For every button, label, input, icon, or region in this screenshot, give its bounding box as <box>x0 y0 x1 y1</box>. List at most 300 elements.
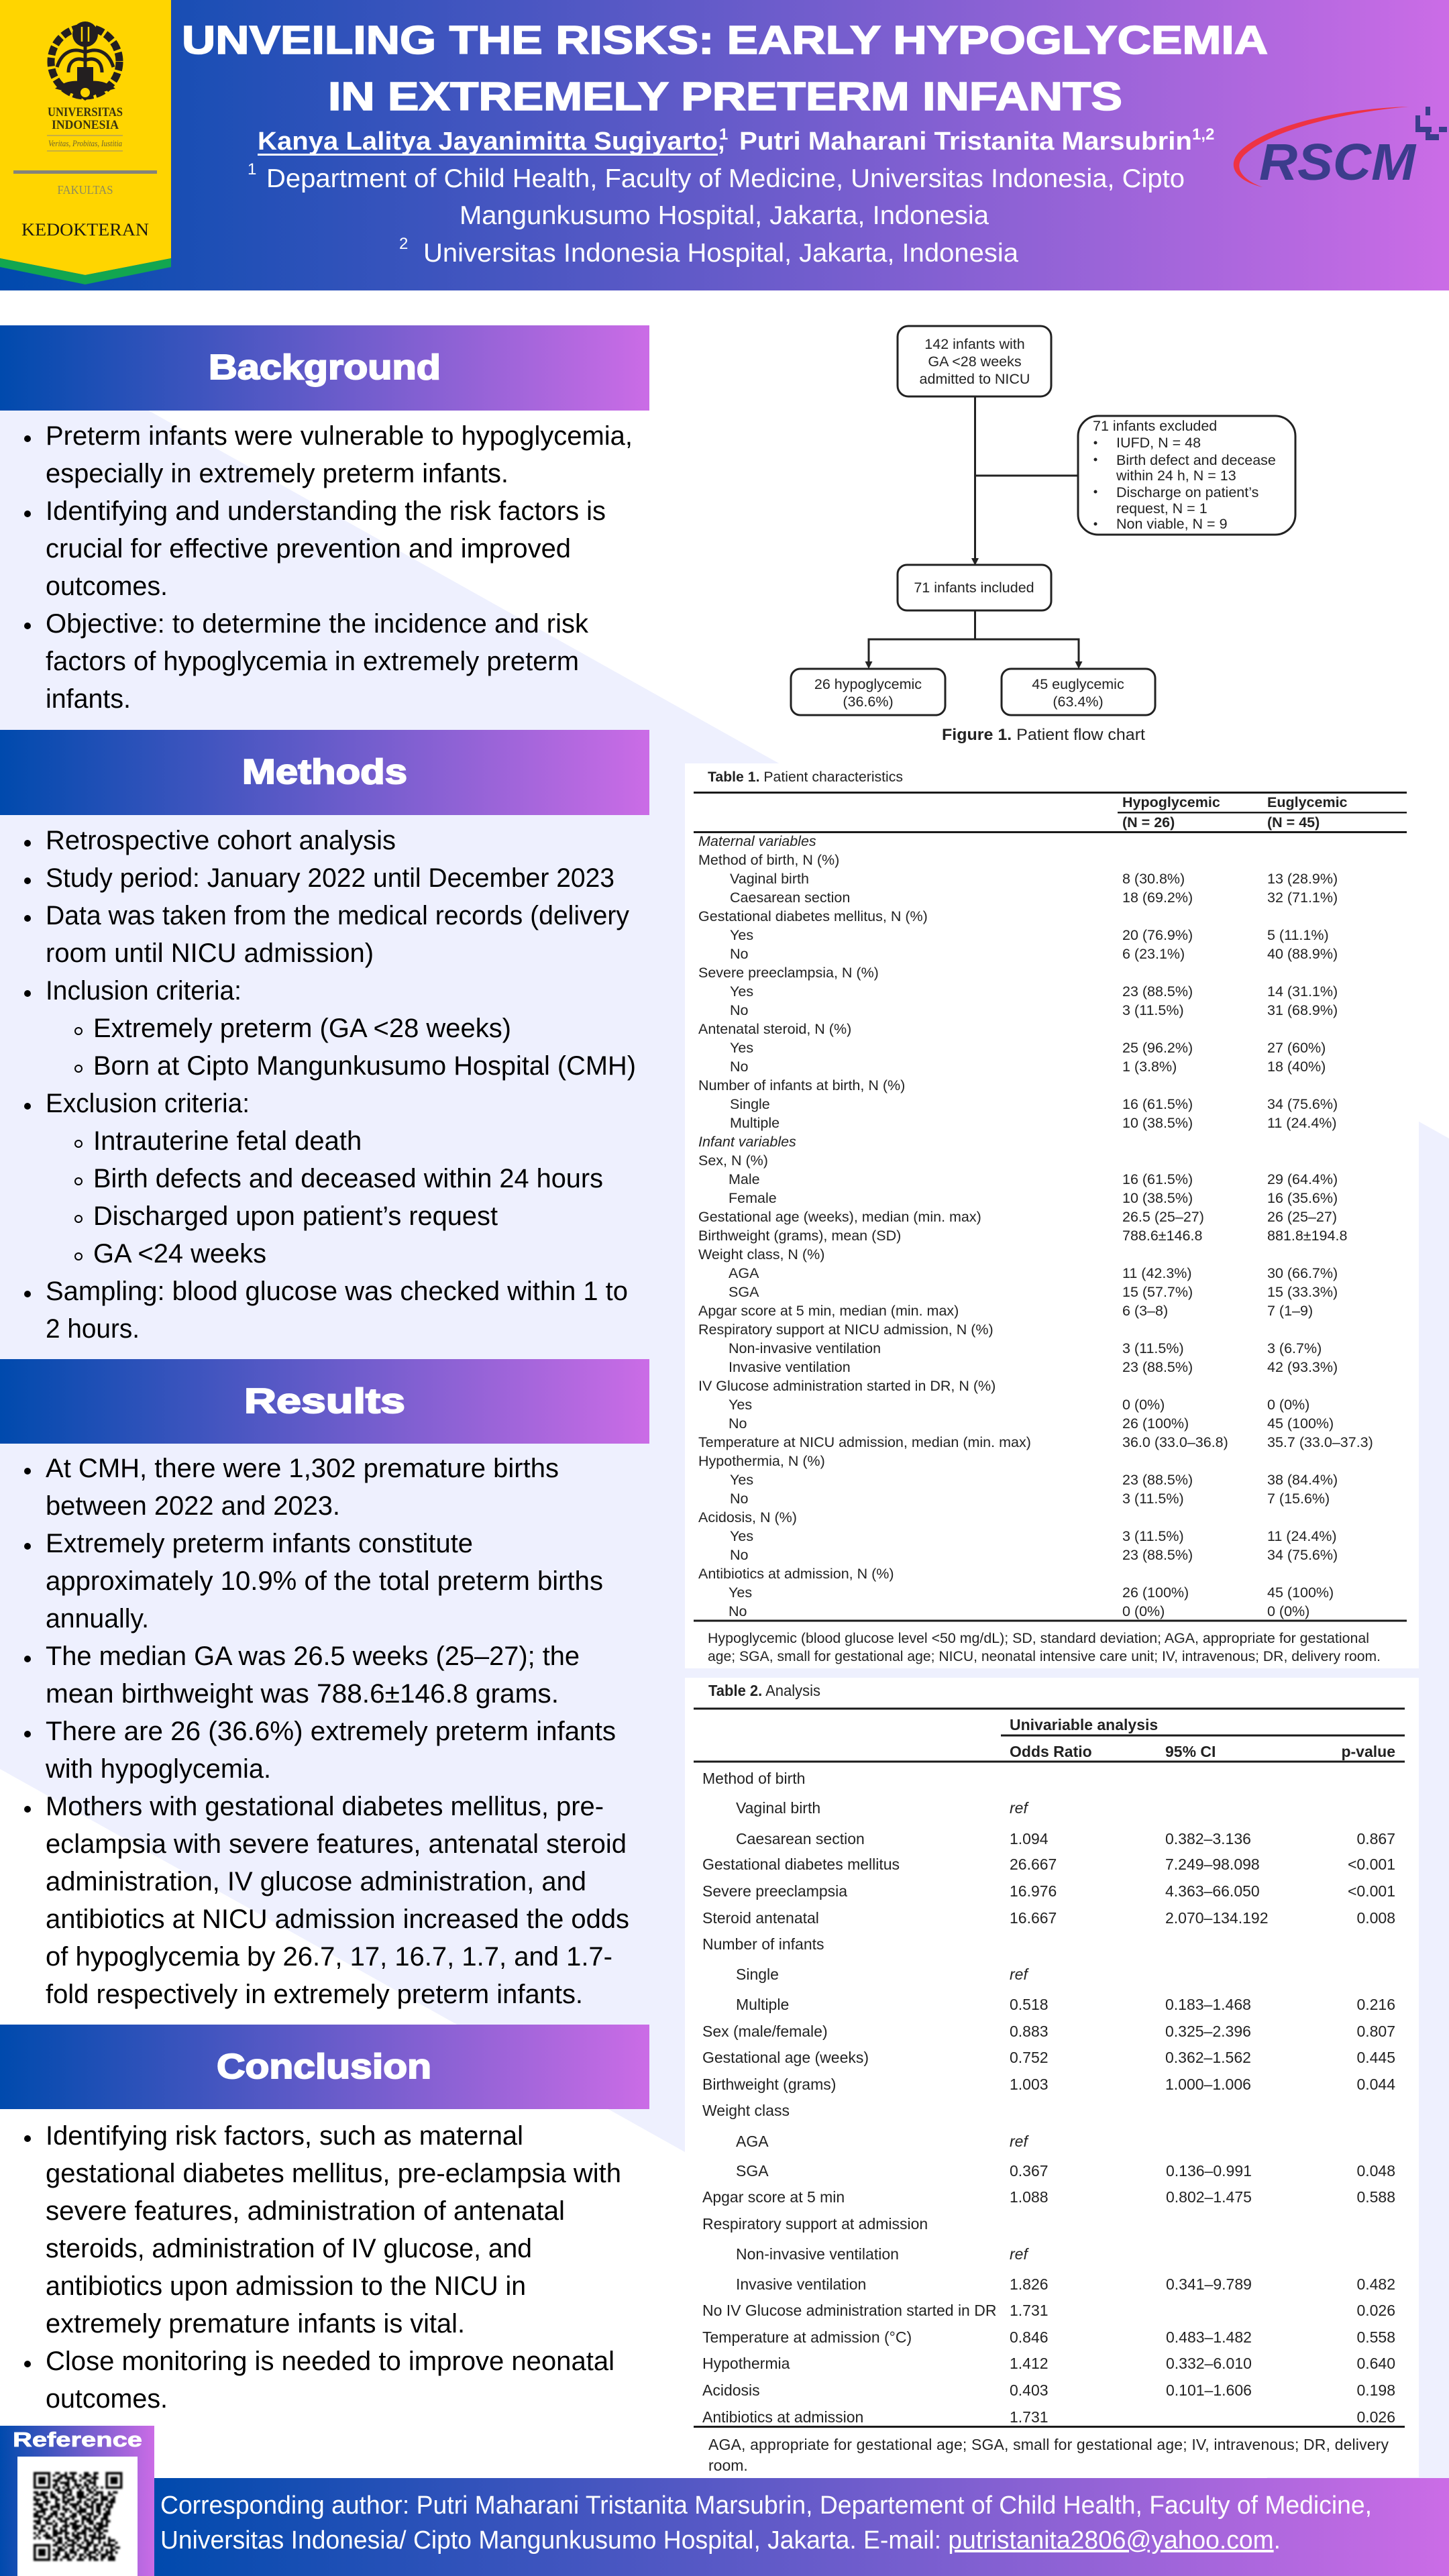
table 2 rows: Antibiotics at admission <box>702 2408 863 2426</box>
table 1 rows: Method of birth, N (%) <box>698 852 839 868</box>
table 1 rows: 23 (88.5%) <box>1122 1472 1193 1488</box>
table 2 rows: 0.483–1.482 <box>1166 2328 1252 2346</box>
table 1 rows: 31 (68.9%) <box>1267 1002 1338 1018</box>
affiliations <box>248 160 1185 268</box>
table 1 rows: Weight class, N (%) <box>698 1246 824 1263</box>
table 1 rows: Caesarean section <box>730 890 850 906</box>
table 1 rows: 7 (1–9) <box>1267 1303 1313 1319</box>
table 1 rows: 6 (3–8) <box>1122 1303 1168 1319</box>
flow box: excluded: within 24 h, N = 13 <box>1116 468 1236 484</box>
table 1 rows: 13 (28.9%) <box>1267 871 1338 887</box>
table 2 rows: 0.362–1.562 <box>1165 2049 1251 2066</box>
table 1 rows: 0 (0%) <box>1267 1397 1309 1413</box>
flow box: enrolled: GA <28 weeks <box>928 354 1022 370</box>
table 1 rows: No <box>729 1603 747 1619</box>
affiliations: Department of Child Health, Faculty of Medicine, Universitas Indonesia, Cipto <box>266 164 1185 193</box>
table 1 header: (N = 45) <box>1267 814 1320 830</box>
table 2 rows: 0.807 <box>1356 2023 1395 2040</box>
table 2 rows: Steroid antenatal <box>702 1909 819 1927</box>
panel: background heading <box>0 325 649 411</box>
table 2 header: p-value <box>1341 1743 1395 1760</box>
table 2 rows: 0.341–9.789 <box>1166 2275 1252 2293</box>
table 2 rows: 0.044 <box>1356 2076 1395 2093</box>
panel: methods text: Inclusion criteria: <box>46 976 241 1006</box>
table 1 rows: No <box>729 1415 747 1432</box>
table 1 rows: 45 (100%) <box>1267 1415 1334 1432</box>
table 2 rows: 0.403 <box>1010 2381 1049 2399</box>
icon: QR code <box>34 2472 122 2561</box>
flow box: euglycemic: 45 euglycemic <box>1032 676 1124 692</box>
panel: methods text: Data was taken from the medical records (delivery <box>46 901 629 930</box>
panel: background text: infants. <box>46 684 131 714</box>
table 1 rows: 26 (25–27) <box>1267 1209 1337 1225</box>
panel: conclusion heading <box>0 2025 649 2109</box>
panel: conclusion text <box>24 2121 621 2414</box>
logo: Universitas Indonesia Faculty of Medicine <box>0 0 171 284</box>
table 1 rows: 16 (35.6%) <box>1267 1190 1338 1206</box>
panel: methods text <box>24 826 636 1344</box>
table 1 rows: Vaginal birth <box>730 871 809 887</box>
table 1 rows: 23 (88.5%) <box>1122 1359 1193 1375</box>
panel: results text: At CMH, there were 1,302 premature births <box>46 1454 559 1483</box>
panel: conclusion text: Identifying risk factors, such as maternal <box>46 2121 523 2151</box>
table 2 rows: 1.731 <box>1010 2408 1049 2426</box>
table 1 rows: Apgar score at 5 min, median (min. max) <box>698 1303 959 1319</box>
flow box: excluded: 71 infants excluded <box>1093 418 1217 434</box>
table 1 rows: 20 (76.9%) <box>1122 927 1193 943</box>
table 1 rows: Yes <box>730 1528 753 1544</box>
flow box: excluded: Discharge on patient’s <box>1116 484 1258 500</box>
reference heading: Reference <box>13 2428 142 2451</box>
table 1 footnote: age; SGA, small for gestational age; NICU, neonatal intensive care unit; IV, intravenous; DR, delivery room. <box>708 1648 1381 1664</box>
panel: results text: fold respectively in extremely preterm infants. <box>46 1980 583 2009</box>
logo: RSCM <box>1234 107 1447 191</box>
panel: results text: administration, IV glucose administration, and <box>46 1867 586 1896</box>
table 2 rows: 4.363–66.050 <box>1165 1882 1260 1900</box>
table 1 rows: 34 (75.6%) <box>1267 1096 1338 1112</box>
table 1 rows: Multiple <box>730 1115 780 1131</box>
panel: results text: There are 26 (36.6%) extremely preterm infants <box>46 1717 616 1746</box>
table 1 rows: 8 (30.8%) <box>1122 871 1185 887</box>
panel: background text: factors of hypoglycemia in extremely preterm <box>46 647 579 676</box>
table 2 footnote: room. <box>708 2457 748 2474</box>
table 1 rows: 10 (38.5%) <box>1122 1115 1193 1131</box>
flow box: included <box>898 565 1051 610</box>
table 1 rows: Female <box>729 1190 777 1206</box>
panel: background text: Identifying and understanding the risk factors is <box>46 496 606 526</box>
table 1 rows: 16 (61.5%) <box>1122 1096 1193 1112</box>
table 2 rows: 0.558 <box>1356 2328 1395 2346</box>
panel: results text: approximately 10.9% of the total preterm births <box>46 1566 603 1596</box>
table 1 header <box>694 792 1407 833</box>
table 1 rows: AGA <box>729 1265 759 1281</box>
table 2 header: Odds Ratio <box>1010 1743 1092 1760</box>
table 1 rows: 15 (33.3%) <box>1267 1284 1338 1300</box>
table 1 rows: Number of infants at birth, N (%) <box>698 1077 905 1093</box>
panel: methods text: Birth defects and deceased within 24 hours <box>93 1164 603 1193</box>
table 2 rows: Apgar score at 5 min <box>702 2188 845 2206</box>
table 1 rows: Maternal variables <box>698 833 816 849</box>
table 1 rows: Temperature at NICU admission, median (min. max) <box>698 1434 1031 1450</box>
panel: results text: The median GA was 26.5 weeks (25–27); the <box>46 1642 580 1671</box>
panel: methods text: Intrauterine fetal death <box>93 1126 362 1156</box>
table 1 rows: Hypothermia, N (%) <box>698 1453 825 1469</box>
table 2 rows: 0.867 <box>1356 1830 1395 1847</box>
table 1 rows: Antibiotics at admission, N (%) <box>698 1566 894 1582</box>
panel: results text: antibiotics at NICU admission increased the odds <box>46 1904 629 1934</box>
flow box: enrolled <box>898 326 1051 396</box>
table 1 rows: 42 (93.3%) <box>1267 1359 1338 1375</box>
table 1 rows: 15 (57.7%) <box>1122 1284 1193 1300</box>
table 1 rows: Severe preeclampsia, N (%) <box>698 965 879 981</box>
panel: results text: between 2022 and 2023. <box>46 1491 340 1521</box>
panel: table 2 analysis <box>685 1678 1419 2477</box>
table 2 rows: 0.382–3.136 <box>1165 1830 1251 1847</box>
panel: results text: of hypoglycemia by 26.7, 17, 16.7, 1.7, and 1.7- <box>46 1942 612 1972</box>
table 2 rows: Multiple <box>736 1996 789 2013</box>
panel: methods text: Exclusion criteria: <box>46 1089 250 1118</box>
table 2 rows: Severe preeclampsia <box>702 1882 847 1900</box>
table 2 rows: 0.482 <box>1356 2275 1395 2293</box>
affiliations: 2 <box>399 235 408 253</box>
table 1 rows: 10 (38.5%) <box>1122 1190 1193 1206</box>
panel: reference with QR code <box>0 2426 154 2576</box>
flow box: included: 71 infants included <box>914 580 1034 596</box>
table 1 footnote: Hypoglycemic (blood glucose level <50 mg/dL); SD, standard deviation; AGA, appropriate for gestational <box>708 1630 1369 1646</box>
table 2 rows: 26.667 <box>1010 1856 1057 1873</box>
panel: background heading: Background <box>209 348 441 387</box>
panel: methods text: Study period: January 2022 until December 2023 <box>46 863 614 893</box>
table 1 rows: 11 (42.3%) <box>1122 1265 1192 1281</box>
table 1 rows: Single <box>730 1096 770 1112</box>
table 1 rows: No <box>730 1002 749 1018</box>
table 2 rows: ref <box>1010 2245 1029 2263</box>
table 1 rows: 3 (6.7%) <box>1267 1340 1322 1356</box>
flow box: excluded: IUFD, N = 48 <box>1116 435 1201 451</box>
panel: methods text: Discharged upon patient’s request <box>93 1201 498 1231</box>
table 2 rows: 0.101–1.606 <box>1166 2381 1252 2399</box>
table 2 rows: 0.198 <box>1356 2381 1395 2399</box>
flow box: excluded: request, N = 1 <box>1116 500 1208 517</box>
panel: conclusion text: Close monitoring is needed to improve neonatal <box>46 2347 614 2376</box>
figure caption: Figure 1. Patient flow chart <box>942 726 1145 744</box>
table 1 rows: 3 (11.5%) <box>1122 1491 1184 1507</box>
table 1 rows: 40 (88.9%) <box>1267 946 1338 962</box>
table 1 rows: IV Glucose administration started in DR, N (%) <box>698 1378 996 1394</box>
table 2 rows: 7.249–98.098 <box>1165 1856 1260 1873</box>
table 2 rows: No IV Glucose administration started in DR <box>702 2302 996 2319</box>
panel: conclusion heading: Conclusion <box>217 2047 431 2086</box>
flow chart: figure 1 <box>791 326 1295 744</box>
panel: methods text: 2 hours. <box>46 1314 140 1344</box>
table 1 rows: 18 (40%) <box>1267 1059 1326 1075</box>
table 2 rows: 0.588 <box>1356 2188 1395 2206</box>
table 1 rows: No <box>730 946 749 962</box>
panel: methods text: Extremely preterm (GA <28 weeks) <box>93 1014 511 1043</box>
table 2 rows: 1.094 <box>1010 1830 1049 1847</box>
flow box: excluded: Non viable, N = 9 <box>1116 516 1228 532</box>
table 1 rows: Male <box>729 1171 760 1187</box>
table 2 rows: 0.883 <box>1010 2023 1049 2040</box>
table 1 rows: 23 (88.5%) <box>1122 1547 1193 1563</box>
panel: methods text: Sampling: blood glucose was checked within 1 to <box>46 1277 628 1306</box>
table 2 rows: 0.846 <box>1010 2328 1049 2346</box>
table 1 rows: 788.6±146.8 <box>1122 1228 1202 1244</box>
affiliations: Mangunkusumo Hospital, Jakarta, Indonesia <box>460 201 989 230</box>
table 1 rows: 881.8±194.8 <box>1267 1228 1347 1244</box>
logo: Universitas Indonesia Faculty of Medicine: Veritas, Probitas, Iustitia <box>48 138 122 148</box>
table 1 rows: 6 (23.1%) <box>1122 946 1185 962</box>
table 1 header: Euglycemic <box>1267 794 1348 810</box>
panel: results text: annually. <box>46 1604 149 1633</box>
flow box: euglycemic <box>1002 669 1155 715</box>
table 1 rows: 26 (100%) <box>1122 1585 1189 1601</box>
table 1 rows: 29 (64.4%) <box>1267 1171 1338 1187</box>
table 1 rows: Yes <box>729 1397 752 1413</box>
table 2 rows: <0.001 <box>1348 1856 1395 1873</box>
table 1 rows <box>698 833 1373 1619</box>
table 2 rows: 0.183–1.468 <box>1165 1996 1251 2013</box>
table 1 rows: Birthweight (grams), mean (SD) <box>698 1228 901 1244</box>
table 1 rows: Yes <box>730 1040 753 1056</box>
table 1 rows: 26 (100%) <box>1122 1415 1189 1432</box>
table 2 rows: 1.412 <box>1010 2355 1049 2372</box>
title: IN EXTREMELY PRETERM INFANTS <box>328 74 1122 119</box>
table 1 rows: 30 (66.7%) <box>1267 1265 1338 1281</box>
table 2 rows <box>702 1770 1395 2426</box>
table 1 rows: 11 (24.4%) <box>1267 1115 1337 1131</box>
table 1 rows: 27 (60%) <box>1267 1040 1326 1056</box>
table 2 rows: Method of birth <box>702 1770 805 1787</box>
logo: Universitas Indonesia Faculty of Medicine: UNIVERSITAS <box>48 105 123 119</box>
table 2 rows: Vaginal birth <box>736 1799 820 1817</box>
table 2 rows: Acidosis <box>702 2381 760 2399</box>
logo: Universitas Indonesia Faculty of Medicine: KEDOKTERAN <box>21 220 149 239</box>
affiliations: 1 <box>248 160 256 178</box>
panel: methods heading: Methods <box>242 753 407 792</box>
table 2 rows: 0.518 <box>1010 1996 1049 2013</box>
panel: results heading <box>0 1359 649 1444</box>
title <box>182 18 1268 119</box>
table 1 rows: Yes <box>730 1472 753 1488</box>
panel: conclusion text: antibiotics upon admission to the NICU in <box>46 2271 526 2301</box>
table 1 rows: SGA <box>729 1284 759 1300</box>
table 1 rows: Sex, N (%) <box>698 1152 768 1169</box>
table 1 rows: No <box>730 1491 749 1507</box>
table 1 rows: 3 (11.5%) <box>1122 1528 1184 1544</box>
authors: 1,2 <box>1192 125 1214 144</box>
panel: conclusion text: outcomes. <box>46 2384 168 2414</box>
table 2 rows: Sex (male/female) <box>702 2023 828 2040</box>
table 1 header: Hypoglycemic <box>1122 794 1220 810</box>
panel: conclusion text: extremely premature infants is vital. <box>46 2309 465 2339</box>
table 1 rows: 26.5 (25–27) <box>1122 1209 1204 1225</box>
flow box: enrolled: 142 infants with <box>924 336 1025 352</box>
table 2 rows: 0.640 <box>1356 2355 1395 2372</box>
affiliations: Universitas Indonesia Hospital, Jakarta, Indonesia <box>423 239 1018 268</box>
table 1 rows: 1 (3.8%) <box>1122 1059 1177 1075</box>
panel: results text: eclampsia with severe features, antenatal steroid <box>46 1829 627 1859</box>
table 1 title: Table 1. Patient characteristics <box>708 769 903 785</box>
flow box: excluded <box>1078 416 1295 535</box>
authors: Putri Maharani Tristanita Marsubrin <box>739 127 1192 156</box>
table 1 rows: Antenatal steroid, N (%) <box>698 1021 851 1037</box>
authors <box>258 125 1214 156</box>
authors: Kanya Lalitya Jayanimitta Sugiyarto <box>258 127 718 156</box>
footer: corresponding author <box>154 2478 1449 2576</box>
table 1 rows: 0 (0%) <box>1122 1397 1165 1413</box>
panel: methods text: Born at Cipto Mangunkusumo Hospital (CMH) <box>93 1051 636 1081</box>
title: UNVEILING THE RISKS: EARLY HYPOGLYCEMIA <box>182 18 1268 62</box>
table 2 rows: Temperature at admission (°C) <box>702 2328 912 2346</box>
table 1 rows: 35.7 (33.0–37.3) <box>1267 1434 1373 1450</box>
logo: Universitas Indonesia Faculty of Medicine: FAKULTAS <box>58 183 113 197</box>
panel: results text: with hypoglycemia. <box>45 1754 271 1784</box>
flow box: hypoglycemic <box>791 669 945 715</box>
panel: results text: Mothers with gestational diabetes mellitus, pre- <box>46 1792 604 1821</box>
table 1 rows: Respiratory support at NICU admission, N (%) <box>698 1322 994 1338</box>
panel: methods text: Retrospective cohort analysis <box>46 826 396 855</box>
panel: methods heading <box>0 730 649 815</box>
footer: corresponding author: Universitas Indonesia/ Cipto Mangunkusumo Hospital, Jakarta. E-mail: putristanita2806@yahoo.com. <box>160 2526 1281 2555</box>
table 2 rows: Gestational diabetes mellitus <box>702 1856 900 1873</box>
table 1 rows: 14 (31.1%) <box>1267 983 1338 1000</box>
table 2 rows: 0.026 <box>1356 2408 1395 2426</box>
flow box: hypoglycemic: (36.6%) <box>843 694 894 710</box>
flow box: excluded: Birth defect and decease <box>1116 452 1276 468</box>
logo: RSCM: RSCM <box>1259 133 1417 191</box>
table 1 rows: Invasive ventilation <box>729 1359 851 1375</box>
table 2 rows: 0.048 <box>1356 2162 1395 2180</box>
panel: background text <box>24 421 633 714</box>
table 2 rows: 0.752 <box>1010 2049 1049 2066</box>
footer: corresponding author: Corresponding author: Putri Maharani Tristanita Marsubrin, Departement of Child Health, Faculty of Medicine, <box>160 2491 1372 2520</box>
panel: methods text: GA <24 weeks <box>93 1239 266 1269</box>
table 1 rows: 32 (71.1%) <box>1267 890 1338 906</box>
table 1 rows: 3 (11.5%) <box>1122 1002 1184 1018</box>
table 2 rows: Non-invasive ventilation <box>736 2245 899 2263</box>
panel: background text: Objective: to determine the incidence and risk <box>46 609 589 639</box>
table 1 rows: 7 (15.6%) <box>1267 1491 1330 1507</box>
table 2 rows: AGA <box>736 2133 769 2150</box>
table 1 rows: 3 (11.5%) <box>1122 1340 1184 1356</box>
table 2 rows: <0.001 <box>1348 1882 1395 1900</box>
table 2 rows: 1.003 <box>1010 2076 1049 2093</box>
table 1 rows: 16 (61.5%) <box>1122 1171 1193 1187</box>
panel: results text <box>24 1454 629 2009</box>
authors: , <box>718 127 725 156</box>
table 2 rows: Single <box>736 1966 779 1983</box>
table 2 rows: 1.731 <box>1010 2302 1049 2319</box>
table 1 rows: 5 (11.1%) <box>1267 927 1329 943</box>
table 1 rows: No <box>730 1547 749 1563</box>
table 2 rows: 0.445 <box>1356 2049 1395 2066</box>
table 2 rows: 2.070–134.192 <box>1165 1909 1268 1927</box>
table 1 rows: Acidosis, N (%) <box>698 1509 797 1525</box>
table 2 header <box>694 1708 1405 1763</box>
table 2 rows: 1.000–1.006 <box>1165 2076 1251 2093</box>
table 2 rows: ref <box>1010 1799 1029 1817</box>
table 2 rows: 0.332–6.010 <box>1166 2355 1252 2372</box>
table 2 rows: 1.088 <box>1010 2188 1049 2206</box>
table 1 rows: Non-invasive ventilation <box>729 1340 881 1356</box>
table 2 rows: Caesarean section <box>736 1830 865 1847</box>
flow box: enrolled: admitted to NICU <box>920 371 1030 387</box>
table 1 rows: 34 (75.6%) <box>1267 1547 1338 1563</box>
table 2 rows: SGA <box>736 2162 769 2180</box>
table 2 rows: Birthweight (grams) <box>702 2076 836 2093</box>
flow box: hypoglycemic: 26 hypoglycemic <box>814 676 922 692</box>
table 2 rows: Gestational age (weeks) <box>702 2049 869 2066</box>
table 2 rows: 1.826 <box>1010 2275 1049 2293</box>
table 1 rows: 0 (0%) <box>1122 1603 1165 1619</box>
table 1 rows: 38 (84.4%) <box>1267 1472 1338 1488</box>
panel: background text: Preterm infants were vulnerable to hypoglycemia, <box>46 421 633 451</box>
table 1 footnote <box>708 1630 1381 1664</box>
table 2 rows: Number of infants <box>702 1935 824 1953</box>
table 2 rows: 0.216 <box>1356 1996 1395 2013</box>
flow connectors and arrows <box>865 396 1083 669</box>
panel: table 1 patient characteristics <box>685 763 1419 1668</box>
table 2 rows: ref <box>1010 2133 1029 2150</box>
panel: background text: crucial for effective prevention and improved <box>46 534 571 564</box>
table 2 rows: 16.976 <box>1010 1882 1057 1900</box>
table 1 rows: 11 (24.4%) <box>1267 1528 1337 1544</box>
table 2 footnote <box>708 2436 1389 2474</box>
flow box: euglycemic: (63.4%) <box>1053 694 1104 710</box>
table 1 rows: Infant variables <box>698 1134 796 1150</box>
panel: conclusion text: severe features, administration of antenatal <box>46 2196 565 2226</box>
table 2 rows: ref <box>1010 1966 1029 1983</box>
table 2 rows: 16.667 <box>1010 1909 1057 1927</box>
table 2 rows: Respiratory support at admission <box>702 2215 928 2233</box>
panel: methods text: room until NICU admission) <box>46 938 374 968</box>
table 1 rows: Gestational age (weeks), median (min. max) <box>698 1209 981 1225</box>
table 2 rows: 0.136–0.991 <box>1166 2162 1252 2180</box>
panel: results heading: Results <box>244 1382 405 1421</box>
panel: results text: Extremely preterm infants constitute <box>46 1529 473 1558</box>
table 1 rows: 23 (88.5%) <box>1122 983 1193 1000</box>
table 1 rows: 0 (0%) <box>1267 1603 1309 1619</box>
panel: conclusion text: gestational diabetes mellitus, pre-eclampsia with <box>46 2159 621 2188</box>
table 2 rows: Weight class <box>702 2102 790 2119</box>
table 1 rows: 45 (100%) <box>1267 1585 1334 1601</box>
logo: Universitas Indonesia Faculty of Medicine: INDONESIA <box>52 118 119 132</box>
table 2 header: Univariable analysis <box>1010 1716 1158 1733</box>
table 1 rows: 25 (96.2%) <box>1122 1040 1193 1056</box>
table 1 rows: 18 (69.2%) <box>1122 890 1193 906</box>
table 1 rows: Yes <box>730 927 753 943</box>
table 2 footnote: AGA, appropriate for gestational age; SGA, small for gestational age; IV, intravenous; DR, delivery <box>708 2436 1389 2453</box>
panel: conclusion text: steroids, administration of IV glucose, and <box>46 2234 532 2263</box>
table 2 rows: 0.325–2.396 <box>1165 2023 1251 2040</box>
panel: background text: outcomes. <box>46 572 168 601</box>
table 2 rows: 0.802–1.475 <box>1166 2188 1252 2206</box>
table 1 rows: Gestational diabetes mellitus, N (%) <box>698 908 928 924</box>
table 1 header: (N = 26) <box>1122 814 1175 830</box>
table 2 rows: 0.008 <box>1356 1909 1395 1927</box>
table 2 rows: Invasive ventilation <box>736 2275 866 2293</box>
authors: 1 <box>719 125 728 144</box>
panel: results text: mean birthweight was 788.6±146.8 grams. <box>46 1679 559 1709</box>
table 2 rows: 0.367 <box>1010 2162 1049 2180</box>
table 2 header: 95% CI <box>1165 1743 1216 1760</box>
table 1 rows: No <box>730 1059 749 1075</box>
table 2 rows: Hypothermia <box>702 2355 790 2372</box>
table 1 rows: Yes <box>730 983 753 1000</box>
panel: background text: especially in extremely preterm infants. <box>46 459 508 488</box>
table 2 rows: 0.026 <box>1356 2302 1395 2319</box>
